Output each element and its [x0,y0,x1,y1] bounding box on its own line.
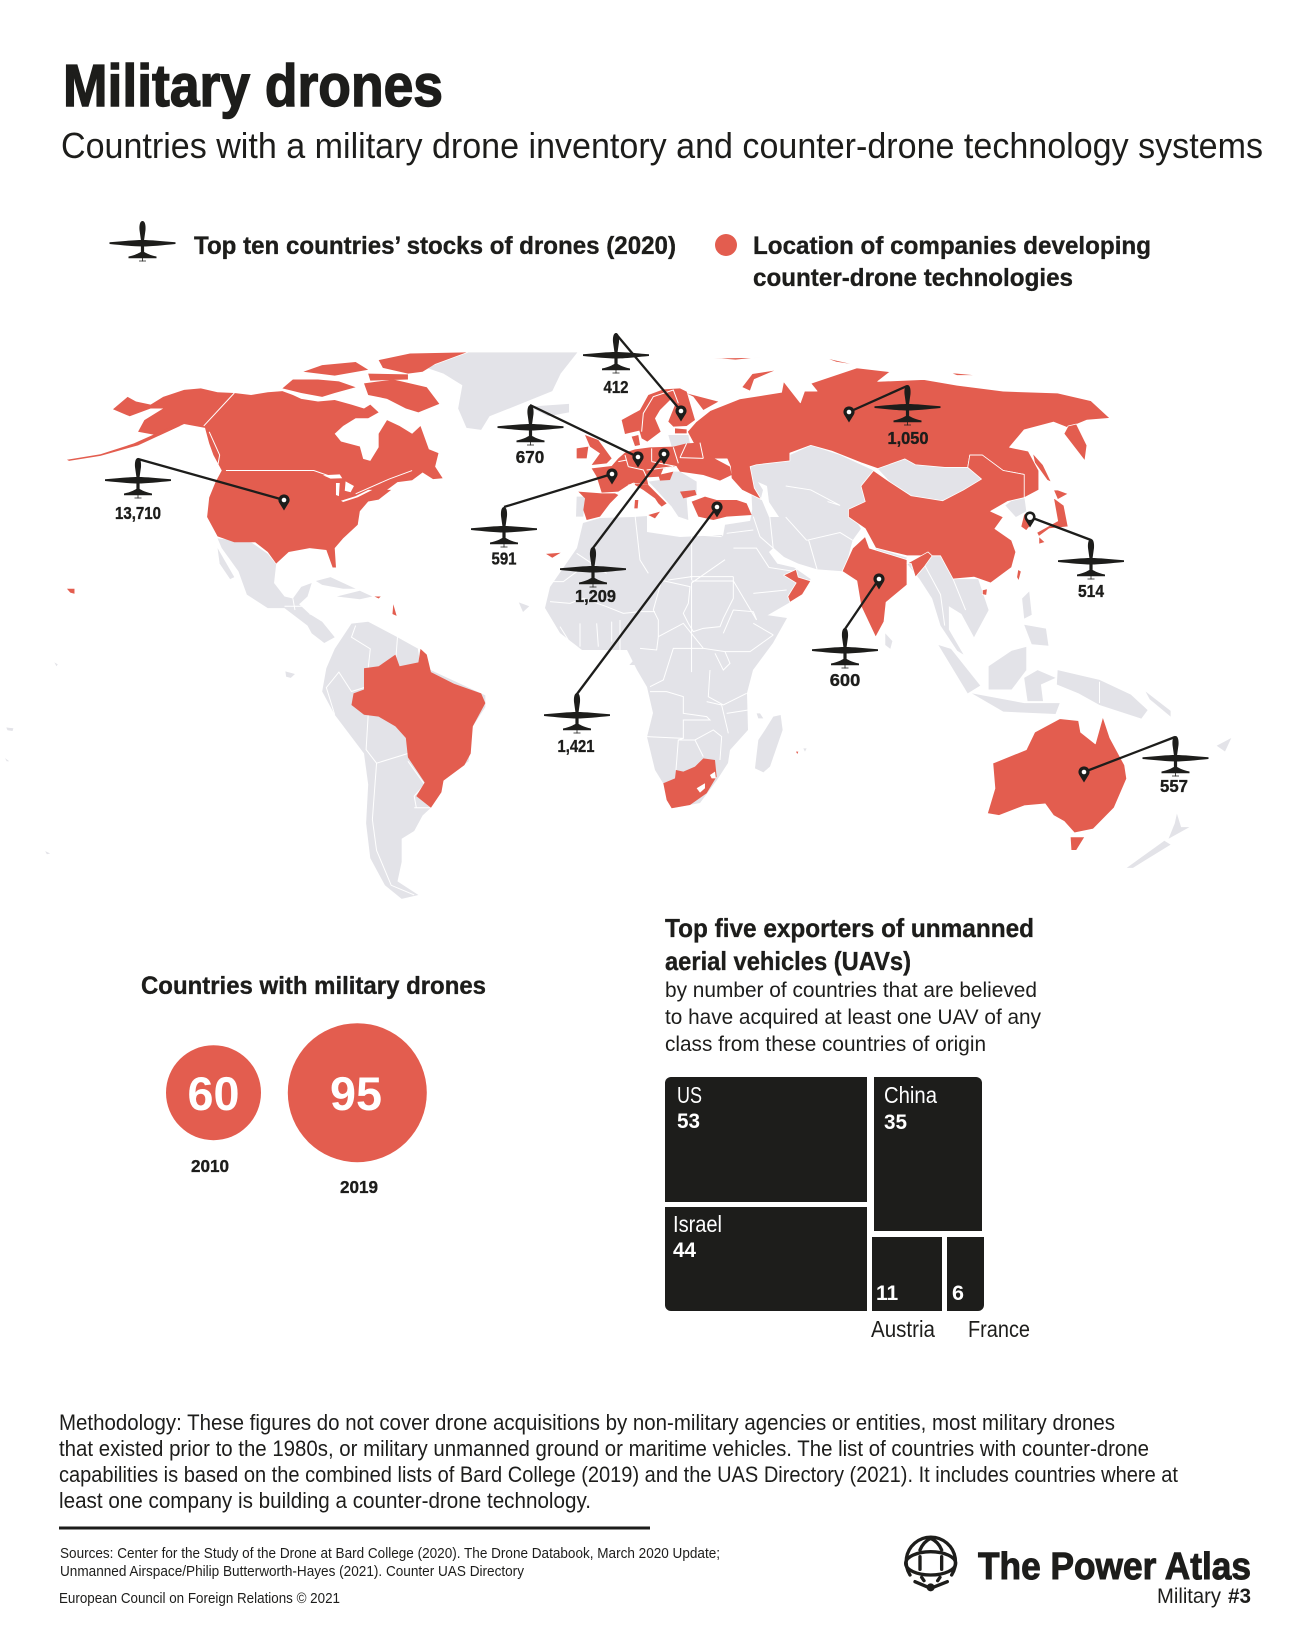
pin: Finland [675,405,687,422]
methodology note: that existed prior to the 1980s, or military unmanned ground or maritime vehicles. The list of countries with counter-drone [59,1436,1149,1461]
pin: Turkey [711,501,723,518]
panel: top five exporters [665,913,1041,1342]
heading: Countries with military drones [141,972,486,1000]
drone: US 13,710: 13,710 [115,503,161,523]
methodology note: least one company is building a counter-drone technology. [59,1488,591,1513]
connector lines [138,334,1175,772]
legend: red dot label: counter-drone technologies [753,264,1073,292]
treemap [665,1077,1030,1342]
tile: US: 53 [677,1110,700,1133]
pin: Germany [632,451,644,468]
methodology note [59,1410,1178,1513]
drone: US 13,710 [105,458,171,523]
tile: US: US [677,1082,702,1108]
tile: Israel: 44 [673,1239,696,1262]
drone: Turkey 1,421: 1,421 [558,736,595,756]
North America inner lines [204,393,412,502]
drone: Turkey 1,421 [544,693,610,756]
methodology note: Methodology: These figures do not cover drone acquisitions by non-military agencies or entities, most military drones [59,1410,1115,1435]
tile: Israel: Israel [673,1211,722,1237]
pin: Russia [843,406,855,422]
year label 2010: 2010 [191,1156,229,1176]
circle: 2019 value 95 [288,1023,427,1162]
year label 2019: 2019 [340,1177,378,1197]
pin: Poland [658,448,670,464]
label: France: France [968,1316,1030,1342]
drone: Germany 670 [498,405,564,467]
drone: Russia 1,050: 1,050 [888,428,929,448]
drone: France 591: 591 [492,548,517,568]
heading: aerial vehicles (UAVs) [665,946,911,976]
red countries: Europe and Middle East [577,388,752,520]
subtitle: Countries with a military drone inventory and counter-drone technology systems [61,125,1263,166]
sources: Unmanned Airspace/Philip Butterworth-Hayes (2021). Counter UAS Directory [60,1564,525,1580]
description: to have acquired at least one UAV of any [665,1005,1041,1029]
legend: red dot [715,234,737,256]
drone: Finland 412: 412 [604,377,629,397]
description: class from these countries of origin [665,1032,986,1056]
drone: Germany 670: 670 [516,447,545,467]
drone: Australia 557 [1142,736,1208,796]
series label: #3 [1228,1585,1251,1608]
pin: South Korea [1024,511,1036,528]
drone: Russia 1,050 [874,385,940,448]
heading [665,913,1034,976]
legend: red dot label: Location of companies developing [753,232,1151,260]
drone: France 591 [471,507,537,568]
drone: Australia 557: 557 [1160,776,1188,796]
tile: Austria [872,1237,942,1311]
Caspian Sea [758,482,779,517]
grey land [5,352,1231,899]
panel: countries with military drones [141,972,486,1197]
series label: Military [1157,1585,1221,1608]
title: Military drones [63,53,443,119]
legend: drone icon [110,221,176,262]
tile: Austria: 11 [876,1282,899,1305]
methodology note: capabilities is based on the combined lists of Bard College (2019) and the UAS Directory (2021). It includes countries where at [59,1462,1178,1487]
drone: India 600 [812,628,878,690]
heading: Top five exporters of unmanned [665,913,1034,943]
pin: India [873,573,885,590]
sources: Sources: Center for the Study of the Drone at Bard College (2020). The Drone Databook, March 2020 Update; [60,1546,720,1562]
red country: South Africa [663,752,798,808]
grey land borders [285,486,1100,895]
red countries: Americas [67,352,561,808]
pin: USA [278,494,290,510]
circle: 2010 value 60: 60 [188,1067,240,1120]
copyright: European Council on Foreign Relations © 2021 [59,1591,340,1607]
world map [5,352,1231,899]
drone: South Korea 514 [1058,539,1124,601]
tile: France: 6 [952,1282,964,1305]
red countries: Asia and Oceania [687,357,1127,850]
tile: Israel [665,1207,867,1311]
drone: India 600: 600 [830,670,861,690]
drone: South Korea 514: 514 [1078,581,1104,601]
description [665,978,1041,1056]
description: by number of countries that are believed [665,978,1037,1002]
circle: 2019 value 95: 95 [330,1067,382,1120]
drone: Poland 1,209: 1,209 [575,586,616,606]
tile: US [665,1077,867,1202]
circle: 2010 value 60 [166,1045,261,1140]
label: Austria: Austria [871,1316,935,1342]
legend: drone label: Top ten countries’ stocks of drones (2020) [194,232,676,260]
sources [60,1546,720,1580]
logo: The Power Atlas [906,1537,1251,1608]
legend [110,221,1151,292]
wordmark: The Power Atlas [978,1546,1251,1588]
tile: France [947,1237,984,1311]
tile: China: China [884,1082,937,1108]
icon: globe with headset [906,1537,956,1591]
tile: China [874,1077,982,1231]
pin: France [606,468,618,484]
drone: Poland 1,209 [560,547,626,606]
pin: Australia [1078,766,1090,782]
tile: China: 35 [884,1111,907,1134]
drone: Finland 412 [583,333,649,397]
legend: red dot label [753,232,1151,292]
